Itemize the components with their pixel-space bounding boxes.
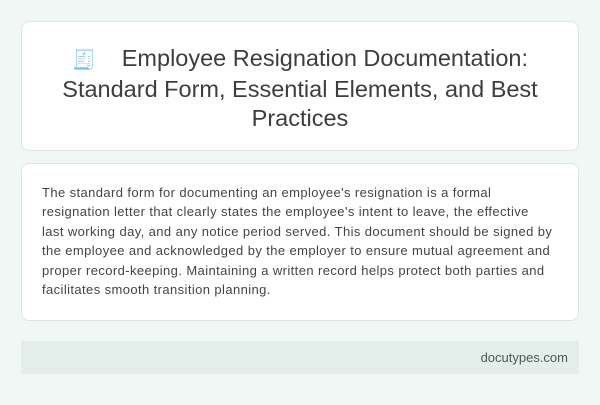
panel: description bbox=[21, 163, 579, 321]
text block: The standard form for documenting an employee's resignation is a formal resignation letter that clearly states the employee's intent to leave, the effective last working day, and any notice period served. This document should be signed by the employee and acknowledged by the employer to ensure mutual agreement and proper record-keeping. Maintaining a written record helps protect both parties and facilitates smooth transition planning. bbox=[42, 185, 552, 297]
footer bbox=[21, 341, 579, 374]
title: 🧾 Employee Resignation Documentation: Standard Form, Essential Elements, and Best Practices bbox=[62, 45, 538, 131]
panel: title bbox=[21, 21, 579, 151]
footer: docutypes.com bbox=[481, 350, 568, 365]
